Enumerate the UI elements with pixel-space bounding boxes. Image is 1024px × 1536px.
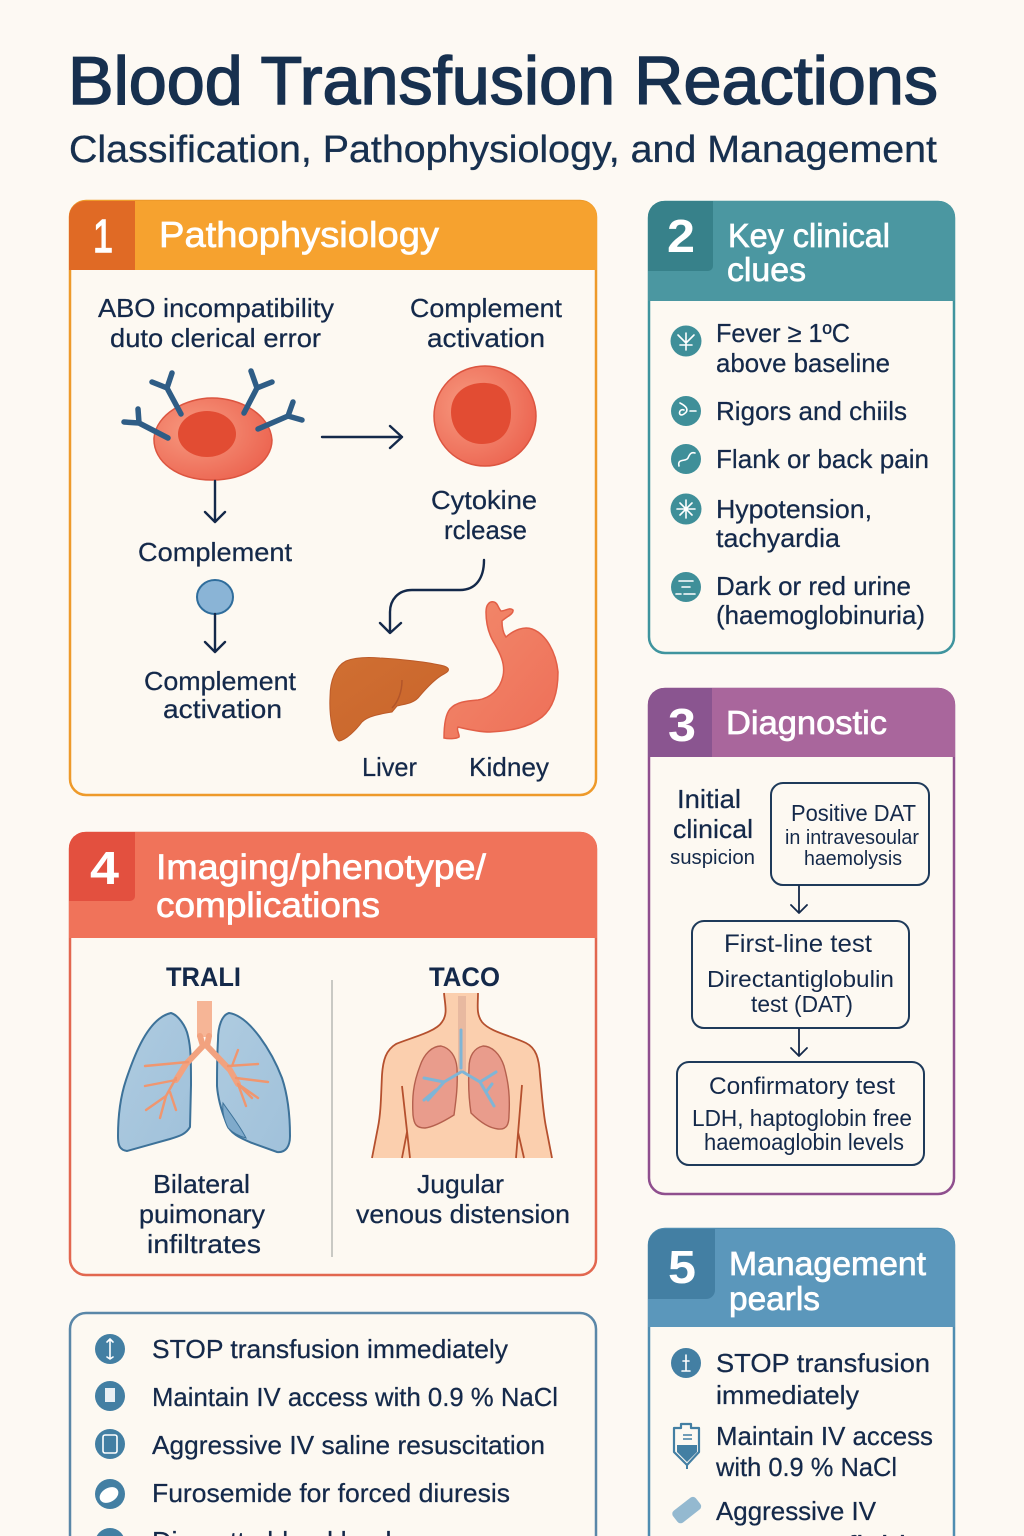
icon: kidney (stomach shape) <box>444 602 558 739</box>
pearl: stop transfusion: STOP transfusion <box>716 1348 930 1378</box>
arrow: to first-line test <box>791 886 807 913</box>
clue: rigors: Rigors and chiils <box>716 396 907 426</box>
arrow: cell to lysed cell <box>322 426 402 448</box>
panel 3 header bar <box>648 688 955 757</box>
icon: complement circle <box>197 580 233 614</box>
box: positive DAT <box>771 783 929 885</box>
panel 2 header bar: Key clinical <box>728 217 890 254</box>
box: first-line test <box>692 921 909 1028</box>
icon: red cell with antibodies <box>124 371 302 480</box>
item: furosemide: Furosemide for forced diuresis <box>152 1478 510 1508</box>
panel 1 header bar: 1 <box>93 210 113 262</box>
box: confirmatory test: Confirmatory test <box>709 1073 895 1100</box>
panel 3 header bar: Diagnostic <box>726 704 887 741</box>
panel 5 header bar <box>648 1229 955 1327</box>
text: initial clinical suspicion: suspicion <box>670 847 755 869</box>
box: confirmatory test <box>677 1062 924 1165</box>
icon: liver <box>330 657 448 741</box>
box: first-line test: Directantiglobulin <box>707 966 894 992</box>
clue: dark urine: (haemoglobinuria) <box>716 600 925 630</box>
label: complement activation bottom <box>144 666 297 724</box>
label: complement activation bottom: Complement <box>144 666 297 696</box>
label: ABO incompatibility: ABO incompatibility <box>98 293 334 323</box>
clue: fever <box>670 318 890 378</box>
panel 3: diagnostic <box>648 688 955 1194</box>
box: positive DAT: Positive DAT <box>791 800 916 826</box>
panel: management list, cropped at bottom <box>70 1313 596 1536</box>
caption: TRALI: puimonary <box>139 1199 265 1229</box>
panel 5 header bar: pearls <box>729 1280 820 1317</box>
arrow: to confirmatory test <box>791 1029 807 1056</box>
label: cytokine release: Cytokine <box>431 485 537 515</box>
pearl: maintain IV access: with 0.9 % NaCl <box>715 1452 897 1482</box>
box: first-line test: test (DAT) <box>751 991 853 1017</box>
heading: TRALI: TRALI <box>166 962 241 992</box>
box: confirmatory test: haemoaglobin levels <box>704 1129 904 1155</box>
panel 2 header bar: 2 <box>667 210 695 262</box>
icon: red cell <box>434 366 536 466</box>
caption: TACO <box>356 1169 570 1229</box>
label: complement activation bottom: activation <box>163 694 282 724</box>
panel 1: pathophysiology <box>69 201 597 795</box>
item: stop transfusion: STOP transfusion immediately <box>152 1334 508 1364</box>
label: kidney: Kidney <box>469 752 549 782</box>
pearl: maintain IV access <box>674 1421 933 1482</box>
icon: torso with lungs <box>372 993 552 1158</box>
arrow: down to complement <box>205 481 225 522</box>
item: maintain IV access: Maintain IV access with 0.9 % NaCl <box>152 1382 558 1412</box>
box: positive DAT: haemolysis <box>804 847 902 870</box>
panel 2 header bar <box>648 201 955 301</box>
label: complement activation top <box>410 293 563 353</box>
text: initial clinical suspicion: Initial <box>677 784 741 814</box>
item: saline resuscitation: Aggressive IV saline resuscitation <box>152 1430 545 1460</box>
clue: hypotension: tachyardia <box>716 523 841 553</box>
arrow: curved to organs <box>380 560 484 633</box>
caption: TRALI <box>139 1169 265 1259</box>
caption: TRALI: Bilateral <box>153 1169 250 1199</box>
panel 1 header bar <box>69 201 597 270</box>
clue: fever: above baseline <box>716 348 890 378</box>
box: first-line test: First-line test <box>724 930 872 958</box>
clue: hypotension <box>670 494 872 553</box>
panel 5 header bar: 5 <box>668 1241 696 1293</box>
panel 4: imaging / phenotype / complications <box>69 832 597 1275</box>
title: Blood Transfusion Reactions <box>68 43 938 119</box>
panel 2 header bar: clues <box>727 251 806 288</box>
caption: TACO: Jugular <box>417 1169 504 1199</box>
icon: lungs <box>118 1001 290 1152</box>
label: ABO incompatibility: duto clerical error <box>110 323 321 353</box>
panel 5: management pearls <box>648 1229 955 1536</box>
caption: TRALI: infiltrates <box>147 1229 261 1259</box>
label: cytokine release: rclease <box>444 515 527 545</box>
panel 1 header bar: Pathophysiology <box>159 214 439 255</box>
pearl: stop transfusion <box>671 1348 930 1410</box>
panel 4 header bar <box>69 832 597 938</box>
box: confirmatory test: LDH, haptoglobin free <box>692 1105 912 1131</box>
clue: dark urine <box>671 571 925 630</box>
label: cytokine release <box>431 485 537 545</box>
heading: TACO: TACO <box>429 962 500 992</box>
clue: hypotension: Hypotension, <box>716 494 872 524</box>
subtitle: Classification, Pathophysiology, and Management <box>69 129 937 171</box>
label: liver: Liver <box>362 752 417 782</box>
clue: flank pain: Flank or back pain <box>716 444 929 474</box>
clue: dark urine: Dark or red urine <box>716 571 911 601</box>
label: complement activation top: activation <box>427 323 545 353</box>
arrow: down to activation <box>205 614 225 652</box>
TRALI column <box>118 962 290 1259</box>
panel 2: key clinical clues <box>648 201 955 653</box>
panel 3 header bar: 3 <box>668 699 696 751</box>
panel 4 header bar: 4 <box>90 842 119 894</box>
pearl: aggressive IV: Aggressive IV <box>716 1496 877 1526</box>
panel 5 header bar: Management <box>729 1245 926 1282</box>
pearl: maintain IV access: Maintain IV access <box>716 1421 933 1451</box>
caption: TACO: venous distension <box>356 1199 570 1229</box>
label: complement: Complement <box>138 537 293 567</box>
TACO column <box>356 962 570 1229</box>
clue: fever: Fever ≥ 1ºC <box>716 318 850 348</box>
text: initial clinical suspicion: clinical <box>673 814 753 844</box>
panel 4 header bar: Imaging/phenotype/ <box>156 848 486 887</box>
pearl: stop transfusion: immediately <box>716 1380 859 1410</box>
label: complement activation top: Complement <box>410 293 563 323</box>
pearl: aggressive IV <box>671 1495 906 1536</box>
panel 4 header bar: complications <box>156 886 380 925</box>
text: initial clinical suspicion <box>670 784 755 869</box>
box: positive DAT: in intravesoular <box>785 826 919 849</box>
label: ABO incompatibility <box>98 293 334 353</box>
